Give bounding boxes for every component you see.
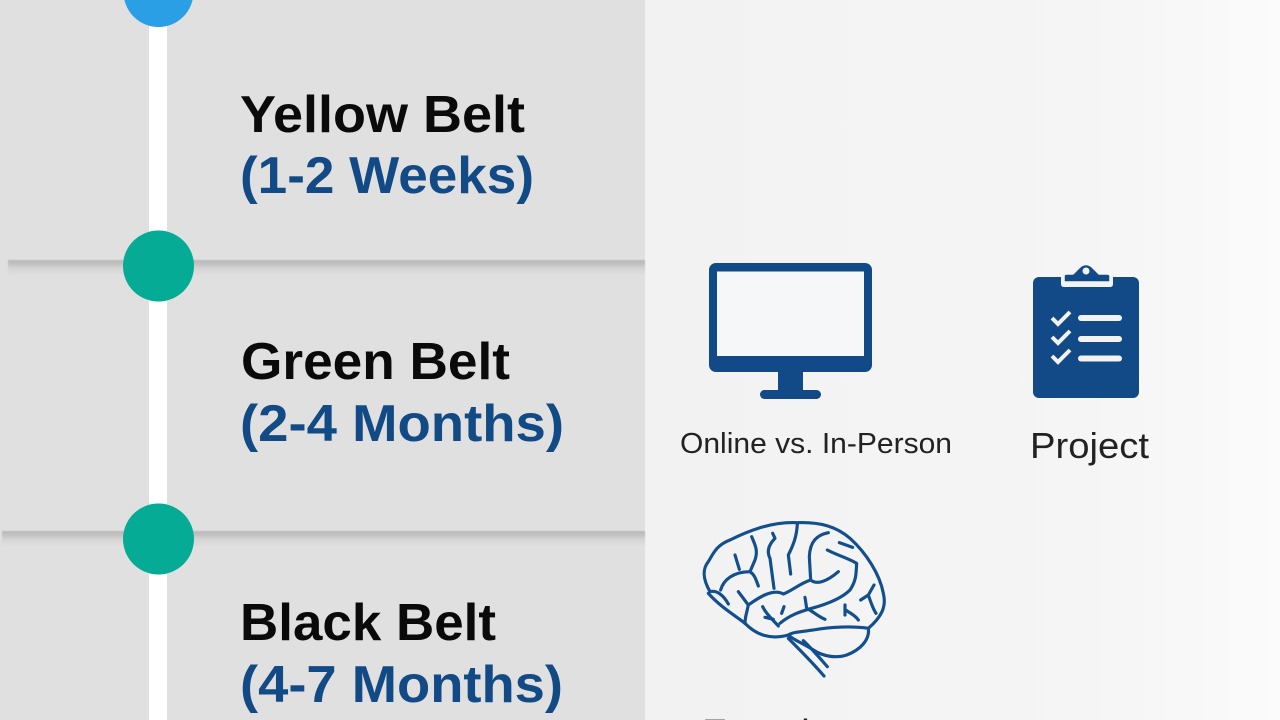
timeline node: blue — [124, 0, 194, 27]
text block: black belt — [240, 594, 563, 714]
icon: brain — [704, 523, 884, 676]
text block: green belt: (2-4 Months) — [240, 395, 564, 453]
timeline node: green belt — [123, 230, 194, 302]
icon: clipboard — [1033, 264, 1139, 398]
text block: green belt: Green Belt — [241, 333, 510, 391]
text block: black belt: (4-7 Months) — [240, 656, 563, 714]
timeline node: black belt — [123, 504, 194, 574]
label: project: Project — [1030, 425, 1149, 466]
text block: yellow belt: Yellow Belt — [240, 86, 525, 144]
icon: monitor — [709, 263, 872, 399]
text block: green belt — [240, 333, 564, 453]
text block: yellow belt — [240, 86, 534, 205]
timeline line — [149, 0, 167, 720]
panel: right background — [645, 0, 1280, 720]
label: online vs in-person: Online vs. In-Person — [680, 428, 952, 460]
text block: black belt: Black Belt — [240, 594, 496, 652]
text block: yellow belt: (1-2 Weeks) — [240, 147, 534, 205]
panel: left timeline background — [0, 0, 645, 720]
